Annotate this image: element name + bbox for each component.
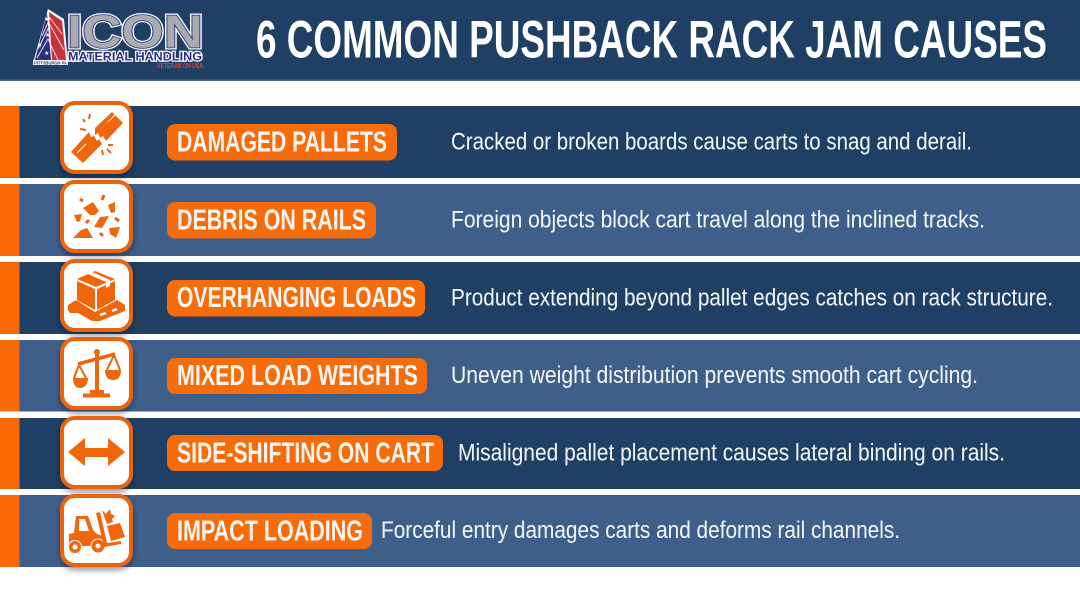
row 6: impact loading [0, 495, 1080, 567]
header band [0, 0, 1080, 81]
label: damaged pallets [167, 124, 397, 160]
icon: box on pallet [62, 261, 131, 330]
logo: Icon Material Handling: ICON [67, 6, 203, 58]
label: impact loading: IMPACT LOADING [177, 516, 363, 548]
row 1: damaged pallets [0, 103, 1080, 178]
description: Uneven weight distribution prevents smooth cart cycling. [451, 362, 978, 389]
row 5: side-shifting on cart [0, 418, 1080, 489]
description: Cracked or broken boards cause carts to snag and derail. [451, 128, 972, 156]
label: side-shifting on cart [167, 435, 443, 471]
logo: Icon Material Handling: ★ [45, 32, 50, 39]
label: debris on rails: DEBRIS ON RAILS [177, 204, 366, 236]
logo: Icon Material Handling: ICON [67, 6, 203, 58]
icon: forklift impact [62, 496, 131, 565]
label: mixed load weights: MIXED LOAD WEIGHTS [177, 360, 418, 392]
logo: Icon Material Handling: MATERIAL HANDLING [68, 50, 202, 64]
logo: Icon Material Handling: PITTSBURGH PA [34, 60, 68, 66]
logo: Icon Material Handling: ★ [37, 42, 42, 49]
row 2: debris on rails [0, 182, 1080, 256]
logo: Icon Material Handling: ★ [44, 16, 49, 23]
logo: Icon Material Handling: VETERAN ON USA [157, 61, 203, 70]
label: overhanging loads [167, 280, 425, 316]
icon: double arrow [62, 418, 131, 487]
label: damaged pallets: DAMAGED PALLETS [177, 126, 387, 158]
row 4: mixed load weights [0, 339, 1080, 412]
icon: debris [62, 182, 131, 251]
icon: broken board [62, 103, 131, 172]
description: Misaligned pallet placement causes lateral binding on rails. [458, 440, 1005, 466]
description: Foreign objects block cart travel along the inclined tracks. [451, 206, 985, 234]
label: debris on rails [167, 202, 376, 238]
row 3: overhanging loads [0, 261, 1080, 334]
icon: balance scale [62, 339, 131, 408]
label: overhanging loads: OVERHANGING LOADS [177, 282, 416, 314]
label: mixed load weights [167, 358, 427, 394]
logo: Icon Material Handling [33, 6, 203, 70]
label: side-shifting on cart: SIDE-SHIFTING ON CART [177, 438, 434, 470]
label: impact loading [167, 513, 372, 549]
description: Forceful entry damages carts and deforms rail channels. [381, 517, 900, 544]
logo: Icon Material Handling: ★ [44, 50, 49, 57]
